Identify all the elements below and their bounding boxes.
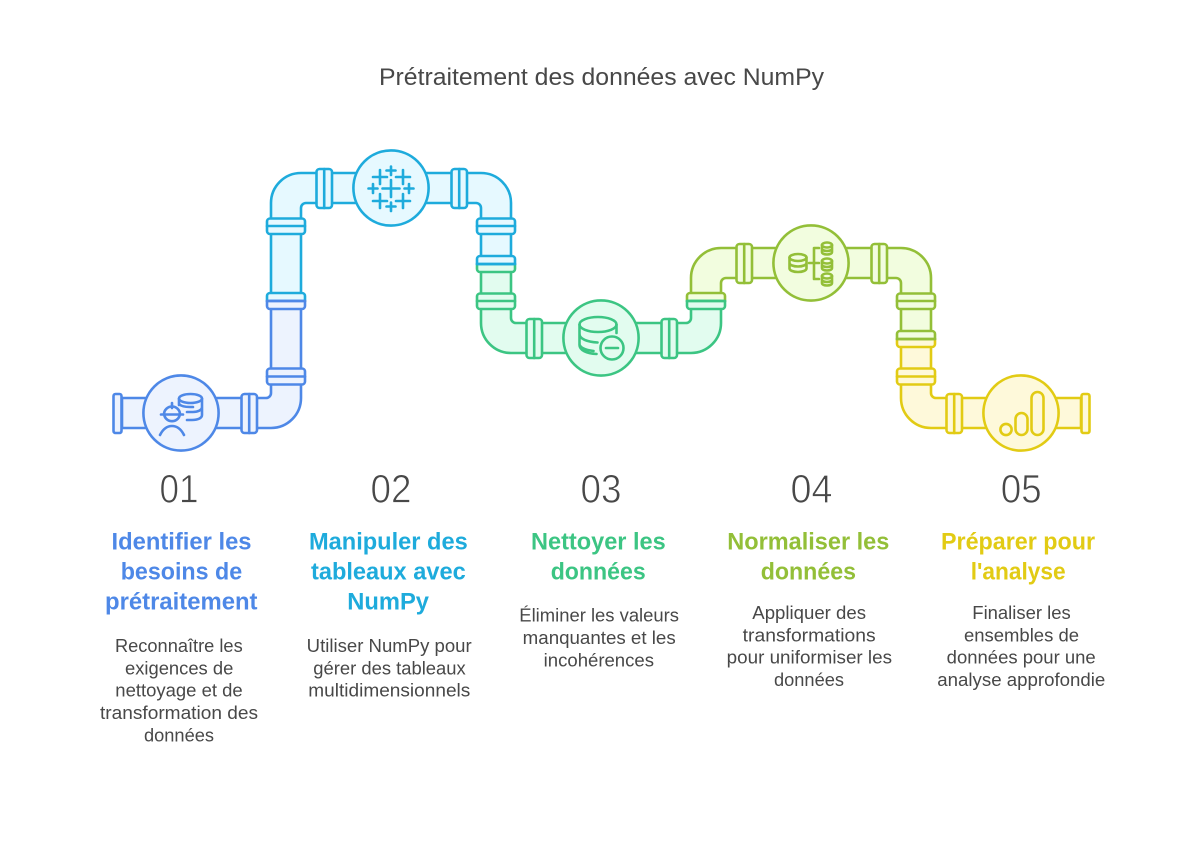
description 1: nettoyage et de bbox=[115, 681, 243, 701]
heading 1: besoins de bbox=[121, 558, 242, 586]
number 03: 03 bbox=[580, 468, 622, 512]
heading 4 bbox=[727, 528, 889, 586]
description 1: transformation des bbox=[100, 703, 258, 723]
heading 3: Nettoyer les bbox=[531, 528, 666, 556]
heading 2 bbox=[309, 528, 468, 616]
description 4: Appliquer des bbox=[752, 603, 866, 623]
description 4: données bbox=[774, 670, 844, 690]
heading 5: Préparer pour bbox=[941, 528, 1095, 556]
number 02: 02 bbox=[370, 468, 412, 512]
description 3: Éliminer les valeurs bbox=[519, 606, 679, 626]
step 5 text bbox=[937, 468, 1105, 690]
pipe segment 5: yellow bbox=[897, 339, 1090, 451]
description 3: manquantes et les bbox=[523, 628, 676, 648]
heading 3: données bbox=[551, 558, 646, 586]
description 4: transformations bbox=[743, 625, 876, 645]
step 2 text bbox=[307, 468, 472, 701]
description 1: données bbox=[144, 726, 214, 746]
description 5: ensembles de bbox=[964, 625, 1079, 645]
description 5 bbox=[937, 603, 1105, 690]
icon: database minus bbox=[580, 317, 624, 360]
number 01: 01 bbox=[160, 468, 198, 512]
icon: bar chart bbox=[1000, 392, 1044, 435]
pipe segment 3: green bbox=[477, 264, 725, 376]
step 1 text bbox=[100, 468, 258, 746]
description 4 bbox=[727, 603, 892, 690]
step 3 text bbox=[519, 468, 679, 670]
icon: database tree bbox=[790, 242, 832, 286]
heading 1: prétraitement bbox=[105, 588, 258, 616]
pipe segment 2: cyan bbox=[267, 150, 515, 301]
heading 1: Identifier les bbox=[112, 528, 252, 556]
description 5: données pour une bbox=[947, 648, 1096, 668]
number 05: 05 bbox=[1001, 468, 1042, 512]
heading 2: Manipuler des bbox=[309, 528, 468, 556]
description 1 bbox=[100, 636, 258, 746]
number 04: 04 bbox=[790, 468, 832, 512]
heading 5 bbox=[941, 528, 1095, 586]
heading 4: Normaliser les bbox=[727, 528, 889, 556]
description 2: Utiliser NumPy pour bbox=[307, 636, 472, 656]
description 5: analyse approfondie bbox=[937, 670, 1105, 690]
title: Prétraitement des données avec NumPy bbox=[379, 64, 824, 91]
description 2: multidimensionnels bbox=[308, 681, 470, 701]
description 3: incohérences bbox=[544, 650, 654, 670]
pipe segment 1: blue bbox=[114, 301, 305, 451]
heading 4: données bbox=[761, 558, 856, 586]
description 3 bbox=[519, 606, 679, 670]
icon: engineer and database bbox=[160, 394, 202, 435]
description 5: Finaliser les bbox=[972, 603, 1071, 623]
heading 5: l'analyse bbox=[971, 558, 1066, 586]
icon: grid of plus signs bbox=[368, 166, 414, 211]
pipeline diagram bbox=[114, 150, 1090, 451]
pipe segment 4: lime bbox=[687, 225, 935, 339]
step 4 text bbox=[727, 468, 892, 690]
description 2: gérer des tableaux bbox=[313, 658, 466, 678]
description 1: Reconnaître les bbox=[115, 636, 243, 656]
heading 2: tableaux avec bbox=[311, 558, 466, 586]
description 2 bbox=[307, 636, 472, 701]
description 4: pour uniformiser les bbox=[727, 648, 892, 668]
heading 2: NumPy bbox=[347, 588, 430, 616]
heading 3 bbox=[531, 528, 666, 586]
heading 1 bbox=[105, 528, 258, 616]
description 1: exigences de bbox=[125, 658, 233, 678]
